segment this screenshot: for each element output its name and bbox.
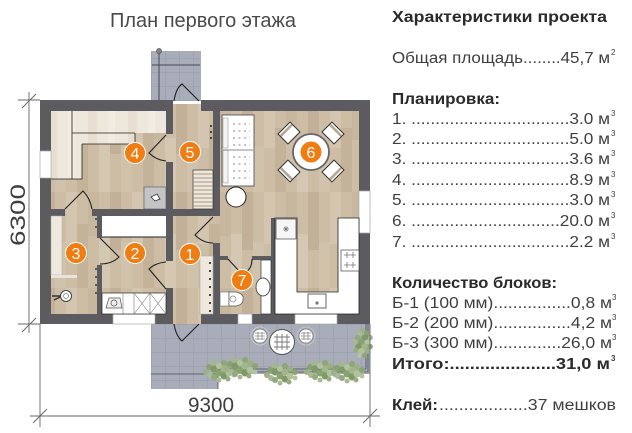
room marker 6: 6 [307, 145, 316, 162]
block row 1: Б-1 (100 мм)................0,8 м [392, 295, 612, 312]
bath fixture, room 3 [52, 290, 72, 302]
kitchen [275, 218, 359, 314]
sofa [222, 115, 254, 186]
glue row: Клей: [392, 397, 438, 414]
title: План первого этажа [110, 9, 297, 32]
layout row 6: 6. ...............................20.0 м [392, 213, 610, 230]
block row 2: Б-2 (200 мм)................4,2 м [392, 315, 612, 332]
windows [40, 151, 370, 324]
specifications panel [392, 9, 617, 414]
room marker 3: 3 [72, 246, 81, 263]
patio table and chairs [251, 327, 315, 354]
layout row 7: 3 [611, 232, 616, 241]
layout row 7: 7. .................................2.2 м [392, 234, 610, 251]
layout heading: Планировка: [392, 91, 500, 108]
stairs [193, 170, 213, 209]
dimension: height [7, 92, 40, 333]
total area: 2 [611, 48, 616, 57]
layout row 6: 3 [611, 211, 616, 220]
layout row 3: 3. .................................3.6 м [392, 151, 610, 168]
layout row 2: 2. .................................5.0 м [392, 131, 610, 148]
dimension: height: 6300 [7, 184, 30, 246]
dimension: width: 9300 [188, 394, 234, 417]
plants [203, 328, 373, 386]
utility: washing machine and cabinets [102, 293, 166, 314]
blocks heading: Количество блоков: [392, 275, 557, 292]
block row 3: Б-3 (300 мм)..............26,0 м [392, 335, 612, 352]
boiler unit [144, 187, 166, 209]
floors [51, 104, 361, 324]
total area: Общая площадь........45,7 м [392, 50, 610, 67]
top entrance terrace [151, 48, 201, 101]
block row 2: 3 [612, 313, 617, 322]
layout row 5: 5. .................................3.0 м [392, 192, 610, 209]
bottom terrace [151, 324, 370, 389]
interior doors [65, 135, 252, 289]
dimension: width [30, 324, 380, 427]
room marker 6 [300, 142, 322, 162]
room marker 2 [124, 242, 146, 264]
specifications heading: Характеристики проекта [392, 9, 607, 26]
layout row 3: 3 [611, 149, 616, 158]
walls [40, 100, 370, 324]
total row: 3 [611, 354, 616, 363]
room marker 2: 2 [131, 246, 140, 263]
room marker 4 [124, 142, 146, 164]
total row: Итого:.....................31,0 м [392, 356, 610, 373]
room marker 7 [232, 270, 252, 290]
dining table and chairs [278, 122, 344, 182]
floor plan [40, 48, 373, 389]
block row 1: 3 [612, 293, 617, 302]
room marker 3 [66, 242, 86, 264]
room marker 7: 7 [238, 273, 247, 290]
kitchen light flooring, room 4 [51, 111, 166, 179]
round side table [226, 187, 246, 207]
room marker 1: 1 [186, 247, 195, 264]
room marker 1 [180, 244, 200, 264]
layout row 1: 3 [611, 109, 616, 118]
glue row: ..................37 мешков [439, 397, 616, 414]
room marker 4: 4 [131, 146, 140, 163]
layout row 2: 3 [611, 129, 616, 138]
room marker 5 [180, 142, 200, 162]
layout row 4: 4. .................................8.9 м [392, 172, 610, 189]
block row 3: 3 [612, 333, 617, 342]
room marker 5: 5 [186, 145, 195, 162]
layout row 1: 1. .................................3.0 м [392, 111, 610, 128]
layout row 5: 3 [611, 190, 616, 199]
wardrobes and storage [51, 125, 213, 314]
bathroom [220, 260, 271, 314]
glue row [392, 397, 616, 414]
layout row 4: 3 [611, 170, 616, 179]
